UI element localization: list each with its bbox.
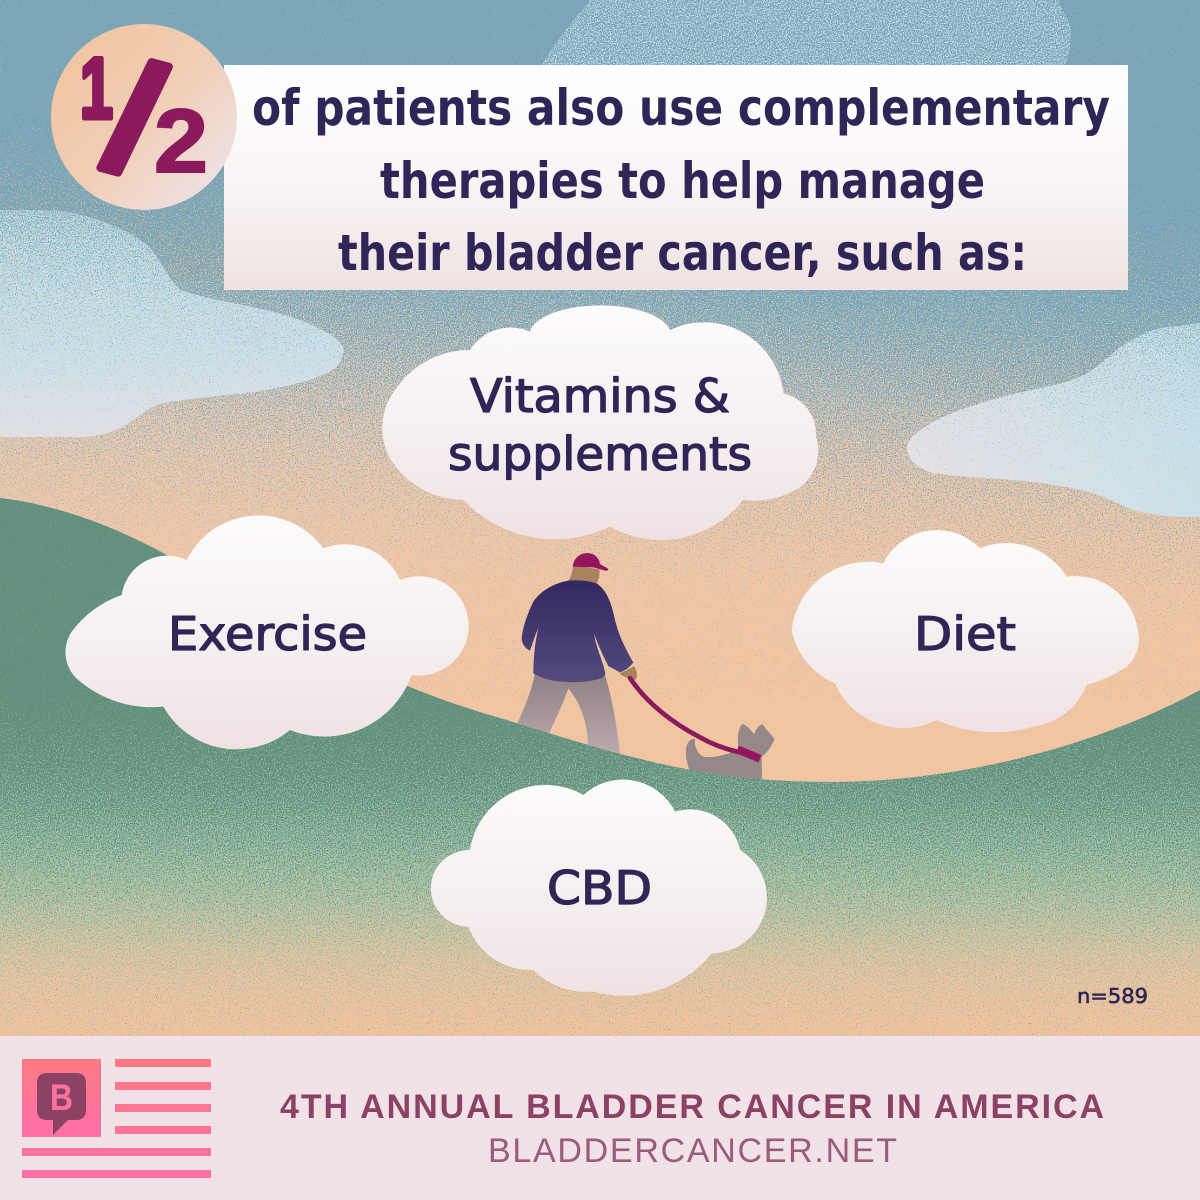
hand (619, 666, 637, 680)
logo lines (22, 1059, 211, 1178)
sample size note: n=589 (1077, 984, 1148, 1008)
logo (22, 1059, 101, 1137)
cloud: CBD (431, 780, 767, 996)
hill (0, 480, 1200, 1040)
leash (630, 678, 738, 752)
person walking dog (517, 553, 774, 780)
cloud: vitamins and supplements: Vitamins & (470, 369, 730, 423)
cloud: vitamins and supplements (382, 305, 818, 540)
cloud: exercise (65, 516, 469, 749)
footer title: 4TH ANNUAL BLADDER CANCER IN AMERICA (280, 1088, 1104, 1126)
cloud: vitamins and supplements: supplements (448, 427, 752, 481)
trousers (517, 673, 620, 755)
jacket (522, 580, 633, 682)
heading text: their bladder cancer, such as: (338, 224, 1027, 282)
cloud: CBD: CBD (547, 861, 652, 915)
cloud: diet (792, 530, 1139, 732)
fraction badge: / (91, 29, 178, 208)
head (568, 565, 600, 584)
cloud: exercise: Exercise (168, 607, 367, 661)
collar (737, 749, 760, 759)
cap (573, 553, 609, 571)
fraction badge: 1 (80, 41, 113, 137)
heading text: therapies to help manage (380, 152, 985, 210)
footer band (0, 1036, 1200, 1200)
logo: B (50, 1077, 73, 1118)
fraction badge: 2 (154, 92, 208, 192)
footer url: BLADDERCANCER.NET (488, 1132, 897, 1170)
fraction badge (51, 24, 237, 210)
sky background (0, 0, 1200, 782)
cloud: diet: Diet (914, 607, 1016, 661)
heading text (252, 79, 1110, 282)
dog (686, 724, 774, 780)
title box (224, 65, 1128, 290)
soft background clouds (0, 0, 1200, 517)
